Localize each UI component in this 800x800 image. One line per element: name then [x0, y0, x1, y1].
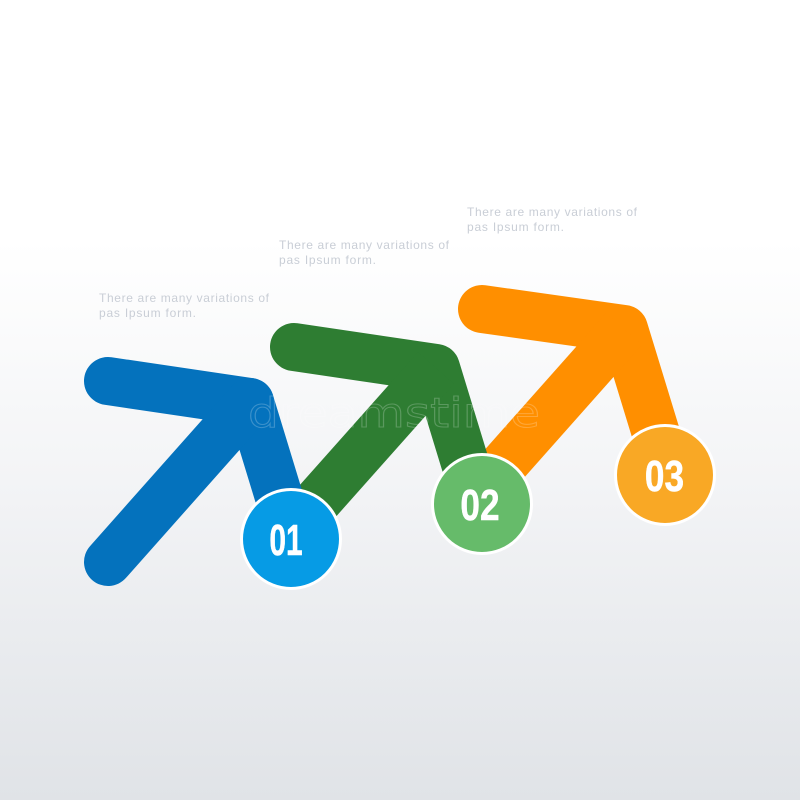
text block: step 03: [467, 205, 638, 234]
badge: 03: [616, 426, 714, 524]
badge: 02: 02: [460, 481, 500, 530]
badge: 02: [432, 454, 532, 554]
text block: step 03: pas Ipsum form.: [467, 220, 564, 234]
text block: step 01: There are many variations of: [99, 291, 270, 305]
badge: 03: 03: [645, 452, 684, 501]
arrow: blue step 01: [108, 381, 286, 562]
text block: step 02: [279, 238, 450, 267]
text block: step 03: There are many variations of: [467, 205, 638, 219]
arrow: green step 02: [294, 347, 472, 521]
watermark: dreamstime: [248, 389, 540, 437]
badge: 01: 01: [269, 515, 303, 564]
text block: step 01: [99, 291, 270, 320]
text block: step 02: There are many variations of: [279, 238, 450, 252]
text block: step 01: pas Ipsum form.: [99, 306, 196, 320]
badge: 01: [242, 490, 340, 588]
arrow: orange step 03: [482, 309, 661, 480]
text block: step 02: pas Ipsum form.: [279, 253, 376, 267]
